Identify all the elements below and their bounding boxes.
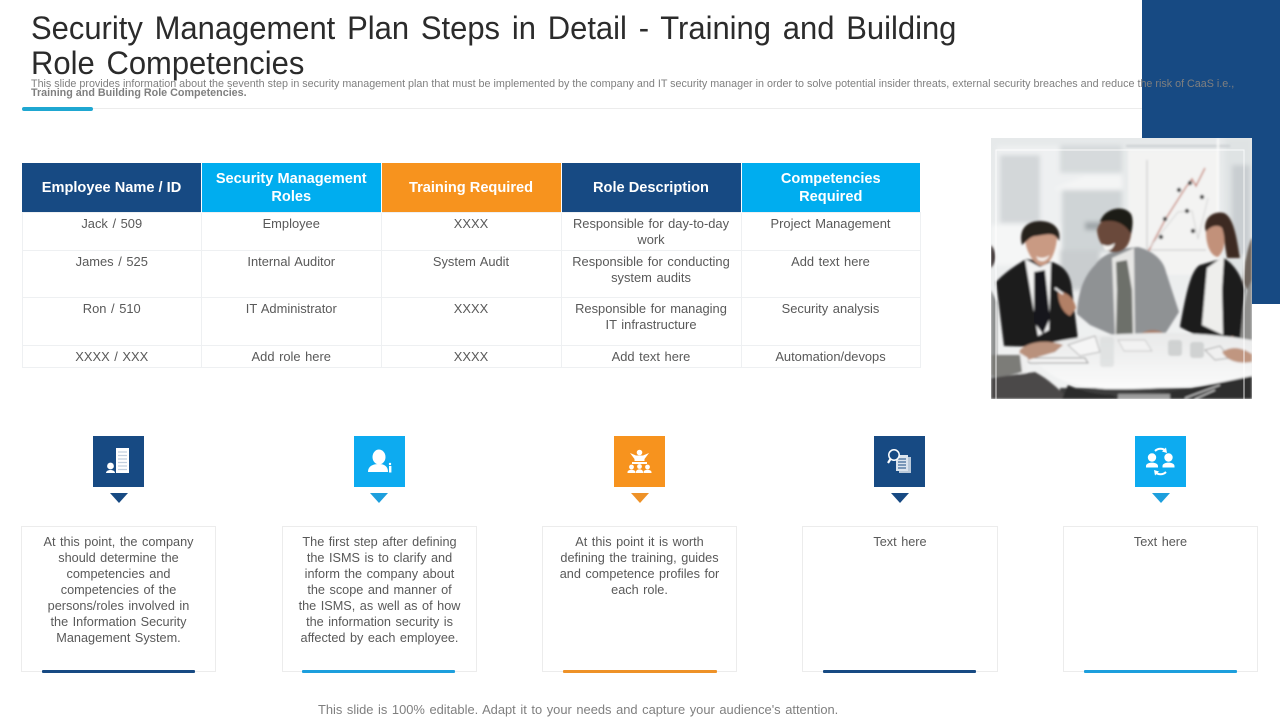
card 1 text: persons/roles involved in (48, 599, 189, 613)
card 4 (802, 526, 998, 672)
photo: business team meeting (991, 138, 1252, 399)
card 2 accent bar (302, 670, 455, 673)
table row: Ron (83, 300, 879, 332)
card 2 text: affected by each employee. (301, 631, 458, 645)
table row: Jack: XXXX (454, 216, 488, 230)
table row: Jack: Employee (263, 216, 320, 230)
table row: James: Internal Auditor (247, 254, 335, 268)
table header row: Training Required (409, 180, 533, 196)
subtitle description: This slide provides information about the seventh step in security management plan that must be implemented by the company and IT security manager in order to solve potential insider threats, external security breaches and reduce the risk of CaaS i.e., (31, 78, 1234, 90)
table row: placeholder: Automation/devops (775, 348, 886, 364)
pointer: tile 3 (631, 493, 649, 503)
left man (996, 259, 1078, 347)
card 1 text: Management System. (56, 631, 181, 645)
card 3 (542, 526, 737, 672)
table (1030, 333, 1252, 389)
card 3 text (560, 535, 719, 597)
table row: Ron: Security analysis (782, 300, 879, 316)
table row: James: Responsible for conducting (572, 254, 730, 268)
header divider (22, 108, 1142, 109)
card 3 text: and competence profiles for (560, 567, 719, 581)
blue corner block (1142, 0, 1280, 304)
table row: Jack: work (637, 232, 665, 246)
title: Role Competencies (31, 44, 304, 81)
card 4 text: Text here (873, 535, 927, 549)
table header row: Required (799, 189, 862, 205)
footer note: This slide is 100% editable. Adapt it to your needs and capture your audience's attention. (318, 702, 838, 717)
card 1 text: the Information Security (50, 615, 186, 629)
table row: James: James / 525 (76, 254, 148, 268)
table row: placeholder (75, 348, 886, 364)
dark floor under the table (1060, 388, 1252, 399)
header accent bar (22, 107, 93, 111)
card 4 accent bar (823, 670, 976, 673)
table row: James: System Audit (433, 254, 509, 268)
table row: placeholder: Add role here (252, 348, 331, 364)
table row: Ron: IT Administrator (246, 300, 337, 316)
table row: placeholder: XXXX / XXX (75, 348, 148, 364)
card 1 text: competencies and (66, 567, 170, 581)
pointer: tile 2 (370, 493, 388, 503)
card 3 text: At this point it is worth (575, 535, 704, 549)
table row: Jack: Responsible for day-to-day (573, 216, 729, 230)
card 2 (282, 526, 477, 672)
table row: James: system audits (611, 270, 691, 284)
title (31, 9, 956, 81)
table header row: Competencies (781, 171, 881, 187)
table row: Jack (81, 216, 890, 246)
subtitle description (31, 78, 1234, 98)
card 3 text: defining the training, guides (560, 551, 719, 565)
card 1 text: At this point, the company (44, 535, 194, 549)
table row: Ron: Ron / 510 (83, 300, 141, 316)
card 2 text: the information security is (306, 615, 453, 629)
subtitle description: Training and Building Role Competencies. (31, 86, 247, 98)
chart board in the photo (1126, 138, 1230, 290)
card 5 (1063, 526, 1258, 672)
table row: placeholder: XXXX (454, 348, 488, 364)
icon tile: group hierarchy (614, 436, 665, 487)
table header row: Employee Name / ID (42, 180, 181, 196)
card 1 (21, 526, 216, 672)
card 3 accent bar (563, 670, 717, 673)
icon tile: company building (93, 436, 144, 487)
card 1 text: competencies of the (61, 583, 176, 597)
white photo frame lines (996, 150, 1244, 399)
pointer: tile 4 (891, 493, 909, 503)
card 2 text (298, 535, 460, 645)
card 2 text: inform the company about (305, 567, 454, 581)
table row: James (76, 254, 870, 284)
icon tile: document search (874, 436, 925, 487)
table row: Jack: Jack / 509 (81, 216, 142, 230)
icon tile: people exchange (1135, 436, 1186, 487)
card 5 text: Text here (1134, 535, 1187, 549)
card 2 text: the ISMS, as well as of how (299, 599, 460, 613)
card 2 text: the scope and manner of (307, 583, 452, 597)
edge people (991, 290, 997, 399)
table header row: Security Management Roles (216, 171, 367, 205)
right woman (1180, 258, 1245, 340)
table row: placeholder: Add text here (612, 348, 690, 364)
foreground hands (1018, 342, 1063, 365)
employee table (22, 163, 921, 368)
table row: James: Add text here (791, 254, 870, 268)
table header row: Role Description (593, 180, 709, 196)
table row: Ron: Responsible for managing (575, 300, 727, 316)
card 1 accent bar (42, 670, 195, 673)
foreground sleeve and dark floor (991, 372, 1068, 399)
card 1 text (44, 535, 194, 645)
center man (1077, 247, 1179, 340)
pointer: tile 5 (1152, 493, 1170, 503)
table row: Ron: IT infrastructure (605, 316, 697, 332)
card 2 text: the ISMS is to clarify and (307, 551, 452, 565)
icon tile: person (354, 436, 405, 487)
table header row (22, 163, 920, 364)
hand holding pen (1058, 292, 1076, 316)
table row: Jack: Project Management (771, 216, 890, 230)
title: Security Management Plan Steps in Detail - Training and Building (31, 9, 956, 46)
card 1 text: should determine the (58, 551, 179, 565)
card 3 text: each role. (611, 583, 668, 597)
table row: Ron: XXXX (454, 300, 488, 316)
pointer: tile 1 (110, 493, 128, 503)
card 2 text: The first step after defining (302, 535, 457, 549)
card 5 accent bar (1084, 670, 1237, 673)
